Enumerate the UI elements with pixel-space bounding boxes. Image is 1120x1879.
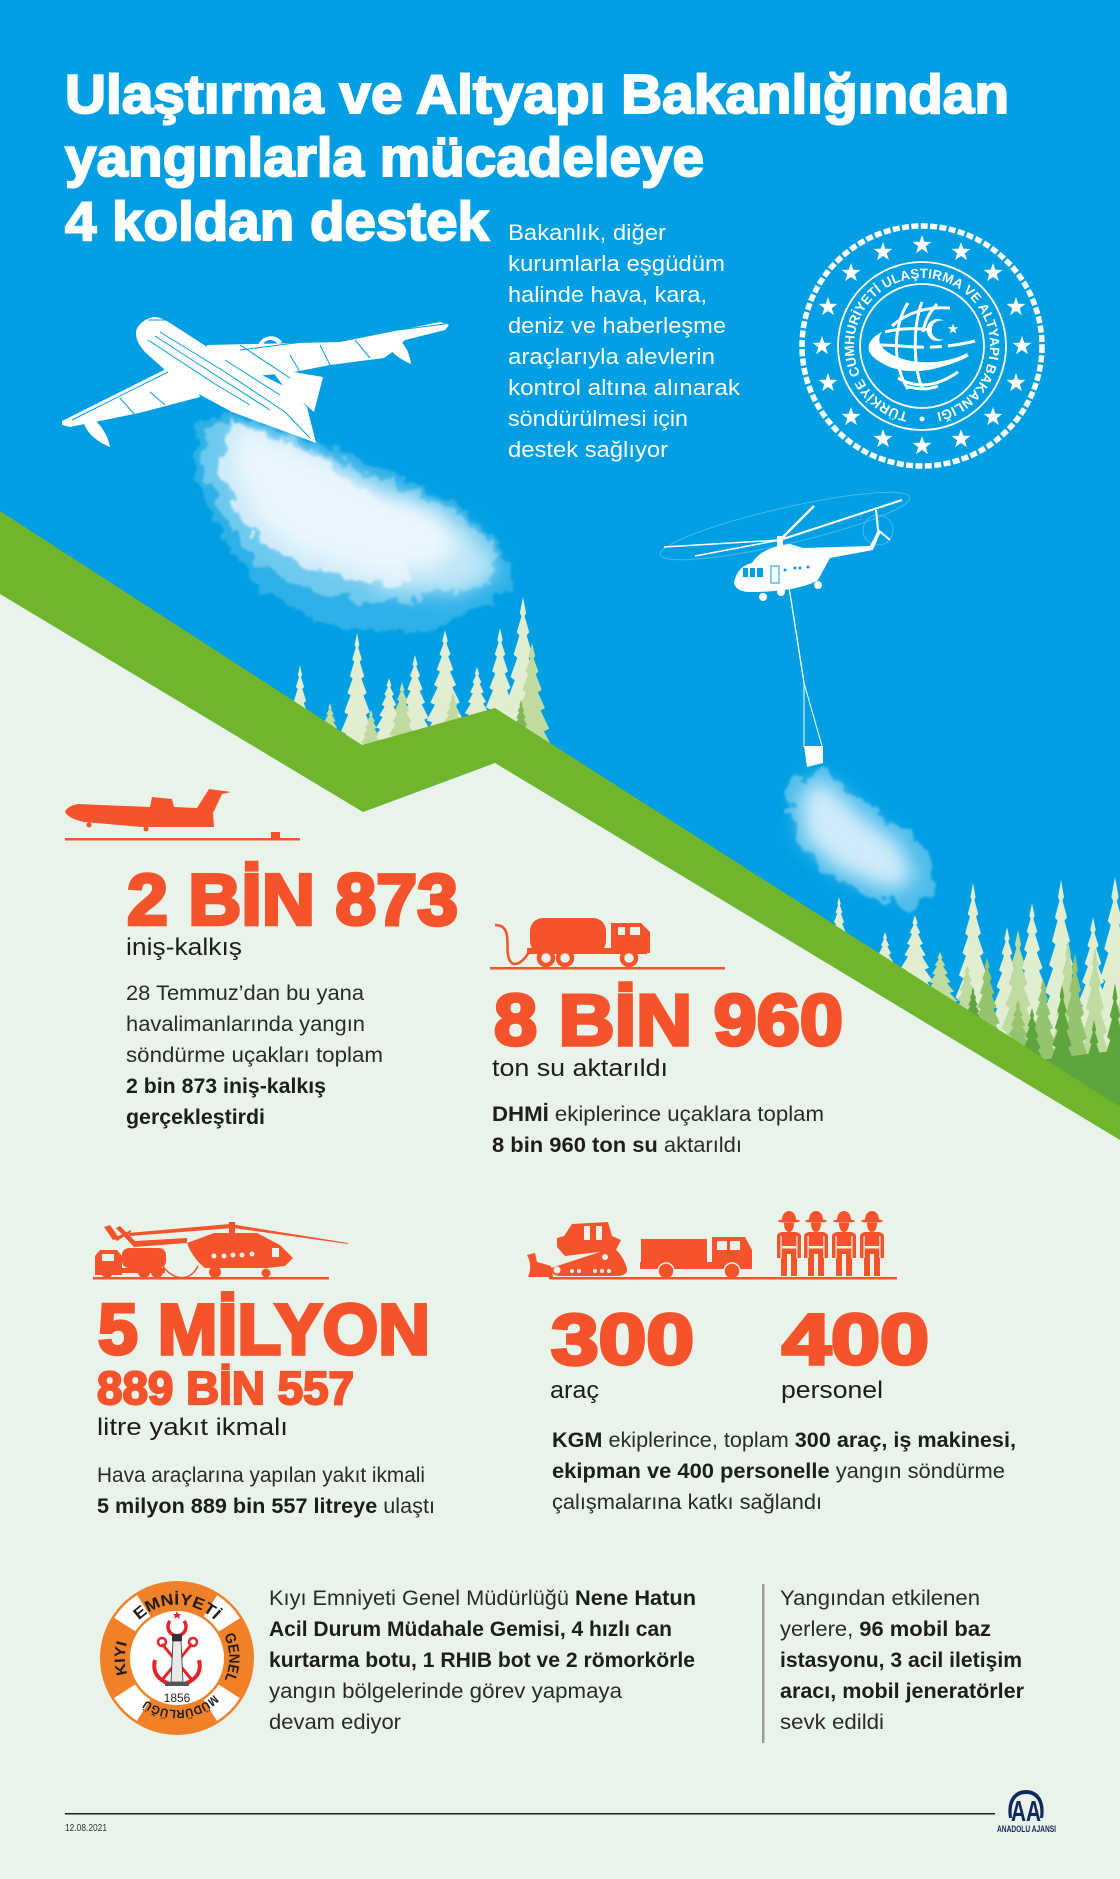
stat: landings: söndürme uçakları toplam (126, 1044, 383, 1067)
stat: landings: 2 BİN 873 (127, 860, 458, 940)
stat: vehicles and personnel: 300 (551, 1301, 694, 1380)
text: coast guard: yangın bölgelerinde görev yapmaya (269, 1680, 622, 1703)
title: Ulaştırma ve Altyapı Bakanlığından (65, 63, 1009, 125)
text: coast guard (269, 1587, 696, 1734)
stat: fuel: 889 BİN 557 (97, 1362, 354, 1414)
land background (0, 594, 1120, 1879)
plane silhouette (62, 317, 449, 447)
Anadolu Ajansi logo (997, 1790, 1056, 1834)
text: communications: aracı, mobil jeneratörler (780, 1680, 1024, 1703)
stat: fuel: Hava araçlarına yapılan yakıt ikmali (97, 1464, 425, 1487)
stat: vehicles and personnel (527, 1211, 1016, 1514)
icon: fuel truck and helicopter (93, 1222, 348, 1280)
icon: orange plane (65, 789, 300, 840)
title (65, 63, 1009, 252)
title: yangınlarla mücadeleye (65, 126, 704, 188)
icon: water tanker (490, 918, 725, 970)
stat: vehicles and personnel: 400 (782, 1301, 929, 1380)
left pine trees (283, 597, 559, 773)
intro text: kurumlarla eşgüdüm (508, 251, 725, 276)
water drop from helicopter (788, 768, 937, 910)
stat: water transfer: 8 bin 960 ton su aktarıldı (492, 1134, 742, 1157)
title: 4 koldan destek (65, 190, 489, 252)
coast guard seal: GENEL (224, 1633, 240, 1680)
stat: landings: iniş-kalkış (126, 934, 242, 961)
intro text: araçlarıyla alevlerin (508, 344, 715, 369)
intro text (508, 220, 741, 462)
stat: landings: havalimanlarında yangın (126, 1013, 365, 1036)
coast guard seal (100, 1581, 254, 1735)
stat: water transfer: DHMİ ekiplerince uçaklara toplam (492, 1103, 824, 1126)
stat: vehicles and personnel: personel (781, 1377, 883, 1404)
ministry seal: TÜRKİYE CUMHURİYETİ ULAŞTIRMA VE ALTYAPI BAKANLIĞI (844, 268, 1000, 422)
text: communications (780, 1587, 1024, 1734)
stat: fuel (93, 1222, 435, 1518)
stat: fuel: 5 milyon 889 bin 557 litreye ulaştı (97, 1495, 435, 1518)
stat: water transfer: ton su aktarıldı (492, 1055, 668, 1082)
intro text: söndürülmesi için (508, 406, 688, 431)
coast guard seal: 1856 (164, 1691, 191, 1705)
stat: vehicles and personnel: araç (550, 1377, 599, 1404)
intro text: kontrol altına alınarak (508, 375, 741, 400)
text: communications: Yangından etkilenen (780, 1587, 980, 1610)
stat: water transfer: 8 BİN 960 (494, 981, 843, 1061)
Anadolu Ajansi logo: AA (1011, 1796, 1041, 1828)
coast guard seal: EMNİYETİ (132, 1590, 223, 1620)
stat: landings (65, 789, 458, 1129)
water drop from plane (193, 413, 514, 633)
footer rule and date: 12.08.2021 (65, 1823, 107, 1834)
stat: landings: gerçekleştirdi (126, 1106, 265, 1129)
right pine trees (825, 877, 1120, 1133)
green ground band (0, 511, 1120, 1140)
intro text: destek sağlıyor (508, 437, 668, 462)
intro text: halinde hava, kara, (508, 282, 707, 307)
intro text: Bakanlık, diğer (508, 220, 666, 245)
icon: dozer, truck and crew (527, 1211, 897, 1280)
text: coast guard: kurtarma botu, 1 RHIB bot ve 2 römorkörle (269, 1649, 695, 1672)
text: coast guard: devam ediyor (269, 1711, 401, 1734)
stat: landings: 28 Temmuz’dan bu yana (126, 982, 364, 1005)
text: coast guard: Kıyı Emniyeti Genel Müdürlüğü Nene Hatun (269, 1587, 696, 1610)
stat: landings: 2 bin 873 iniş-kalkış (126, 1075, 326, 1098)
intro text: deniz ve haberleşme (508, 313, 726, 338)
helicopter with bucket (656, 480, 914, 767)
Anadolu Ajansi logo: ANADOLU AJANSI (997, 1824, 1056, 1834)
coast guard seal: MÜDÜRLÜĞÜ (142, 1695, 219, 1720)
stat: fuel: litre yakıt ikmalı (97, 1414, 288, 1441)
text: communications: sevk edildi (780, 1711, 884, 1734)
stat: vehicles and personnel: çalışmalarına katkı sağlandı (552, 1491, 822, 1514)
stat: fuel: 5 MİLYON (98, 1291, 430, 1370)
text: communications: yerlere, 96 mobil baz (780, 1618, 991, 1641)
ministry seal (799, 223, 1045, 469)
coast guard seal: KIYI (114, 1641, 127, 1676)
text: coast guard: Acil Durum Müdahale Gemisi, 4 hızlı can (269, 1618, 672, 1641)
text: communications: istasyonu, 3 acil iletişim (780, 1649, 1022, 1672)
sky background (0, 0, 1120, 1150)
stat: vehicles and personnel: ekipman ve 400 personelle yangın söndürme (552, 1460, 1005, 1483)
stat: vehicles and personnel: KGM ekiplerince, toplam 300 araç, iş makinesi, (552, 1429, 1016, 1452)
stat: water transfer (490, 918, 843, 1157)
